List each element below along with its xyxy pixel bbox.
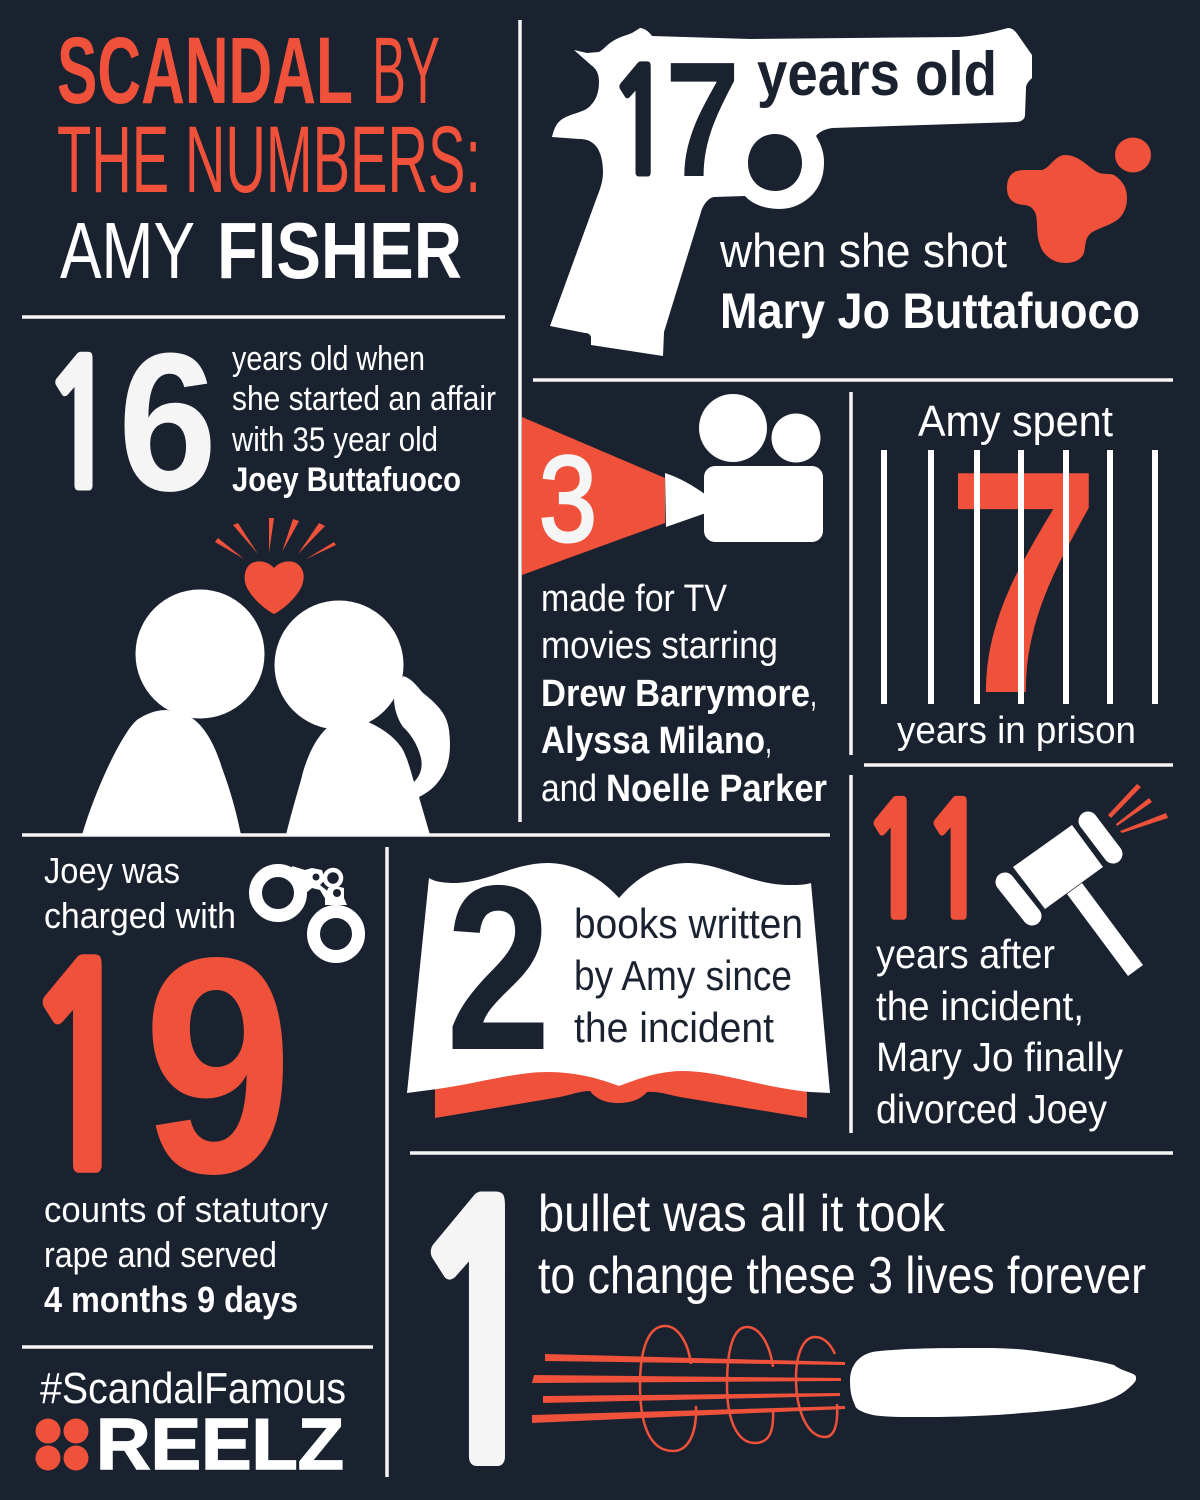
number 7: 7 [946,405,1101,760]
number 11: 1 [860,786,932,941]
title [57,18,481,295]
title: FISHER [217,206,462,295]
text: years old: years old [757,40,997,109]
number 16 [40,312,217,532]
text: Amy spent: Amy spent [918,397,1113,446]
text: counts of statutory rape: 4 months 9 days [44,1279,298,1320]
number 19: 9 [143,894,293,1238]
text: years after the incident: years after [876,931,1055,977]
text: made for TV movies [541,578,827,810]
number 16: 6 [118,312,217,532]
text: affair description: years old when [232,340,425,378]
title: AMY [60,206,195,295]
number 19 [19,894,293,1238]
text: bullet was all it took [538,1185,1146,1305]
man [82,590,264,835]
number 3: 3 [539,431,597,567]
text: years after the incident: the incident, [876,983,1084,1029]
icon: prison bars [881,450,1158,704]
panel: 16 years old [40,312,496,835]
panel: 1 bullet [400,1167,1146,1500]
panel: 3 movies [522,394,827,810]
hashtag: #ScandalFamous [40,1364,346,1413]
text: years after the incident: divorced Joey [876,1086,1107,1132]
number 17 [607,28,740,211]
text: counts of statutory rape: rape and served [44,1234,277,1275]
text: Joey was charged with: Joey was [44,850,180,891]
panel: 7 years in prison [881,397,1158,760]
title: SCANDAL [57,18,353,124]
text: when she shot Mary Jo Buttafuoco [719,224,1140,339]
text: when she shot Mary Jo Buttafuoco: when she shot [719,224,1007,277]
number 17: 7 [665,28,740,211]
text: years in prison: years in prison [897,710,1136,752]
text: Joey was charged with [44,850,236,936]
number 2: 2 [446,836,551,1099]
text: bullet was all it took: bullet was all it took [538,1185,946,1243]
heart [245,561,304,614]
logo: REELZ: REELZ [96,1405,344,1485]
text: books written: the incident [574,1004,774,1051]
text: books written [574,900,803,1051]
icon: open book [407,863,830,1118]
text: affair description: she started an affair [232,380,496,418]
number 19: 1 [19,936,147,1210]
text: books written: by Amy since [574,952,792,999]
text: made for TV movies: and [541,768,597,810]
title: THE NUMBERS: [57,107,481,213]
text: made for TV movies: movies starring [541,625,778,667]
number 11: 1 [920,786,992,941]
text: made for TV movies: Alyssa Milano [541,720,765,762]
icon: movie projector beam [522,417,665,575]
icon: handcuffs [256,866,358,956]
number 17: 1 [607,51,675,196]
text: affair description: with 35 year old [231,421,438,459]
text: made for TV movies: , [810,673,817,715]
text: affair description [231,340,496,499]
text: counts of statutory rape: counts of statutory [44,1189,328,1230]
heart rays [215,518,336,559]
icon: couple with heart [82,518,450,835]
woman with ponytail [274,600,450,835]
title: BY [372,18,440,124]
text: made for TV movies: , [765,720,772,762]
text: Joey was charged with: charged with [44,895,236,936]
text: books written: books written [574,900,803,947]
text: made for TV movies: made for TV [541,578,728,620]
icon: movie camera [665,394,823,542]
text: made for TV movies: Drew Barrymore [541,673,810,715]
icon: gavel [1005,784,1168,976]
number 16: 1 [40,340,121,514]
text: when she shot Mary Jo Buttafuoco: Mary Jo Buttafuoco [720,283,1140,339]
text: affair description: Joey Buttafuoco [232,461,461,499]
text: years after the incident: Mary Jo finally [876,1034,1123,1080]
icon: bullet [850,1348,1136,1417]
text: counts of statutory rape [44,1189,328,1320]
panel: 2 books [407,836,830,1118]
panel: 19 counts [19,850,358,1320]
panel: 17 years old [550,28,1151,356]
icon: gun [550,28,1032,356]
text: years after the incident [876,931,1123,1132]
text: made for TV movies: Noelle Parker [606,768,827,810]
panel: 11 years [860,784,1168,1132]
icon: blood splatter [1007,138,1151,263]
icon: bullet motion trail [532,1326,845,1451]
